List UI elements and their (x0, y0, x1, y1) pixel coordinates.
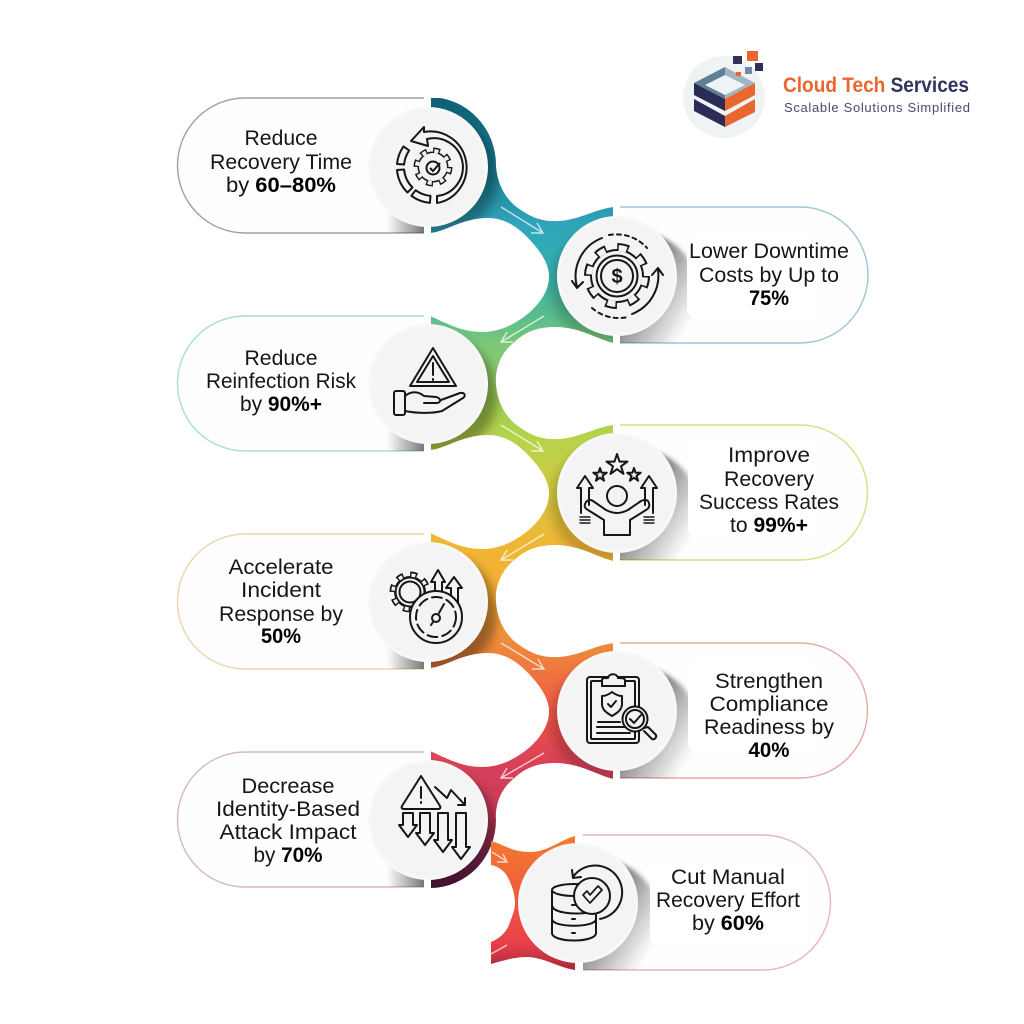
panel: step 8 cut manual recovery effort: by 60% (692, 912, 764, 935)
panel: step 5 accelerate incident response: 50% (261, 625, 301, 648)
icon: gear speedometer with arrows (368, 542, 488, 662)
panel: step 6 strengthen compliance: 40% (748, 739, 790, 762)
panel: step 6 strengthen compliance: Strengthen (715, 670, 823, 693)
panel: step 4 improve recovery success: to 99%+ (730, 514, 808, 537)
panel: step 2 lower downtime costs (620, 206, 869, 344)
panel: step 7 decrease identity attack impact: Identity-Based (216, 798, 360, 821)
panel: step 7 decrease identity attack impact: Decrease (242, 775, 334, 798)
panel: step 3 reduce reinfection risk: Reduce (244, 347, 318, 370)
panel: step 8 cut manual recovery effort: Cut Manual (671, 866, 785, 889)
panel: step 1 reduce recovery time: by 60–80% (226, 174, 336, 197)
panel: step 1 reduce recovery time: Recovery Time (210, 151, 352, 174)
logo: Cloud Tech Services: Scalable Solutions Simplified (784, 100, 970, 115)
panel: step 1 reduce recovery time (176, 97, 424, 234)
panel: step 4 improve recovery success (620, 424, 868, 561)
logo: Cloud Tech Services (683, 51, 970, 138)
logo: Cloud Tech Services: Cloud Tech Services (783, 74, 969, 97)
panel: step 2 lower downtime costs: Lower Downtime (689, 240, 849, 263)
panel: step 7 decrease identity attack impact: by 70% (254, 844, 323, 867)
panel: step 8 cut manual recovery effort: Recovery Effort (656, 889, 800, 912)
icon: hand holding warning triangle (368, 324, 488, 444)
panel: step 3 reduce reinfection risk: by 90%+ (240, 393, 322, 416)
icon: warning with falling arrows (368, 760, 488, 880)
panel: step 5 accelerate incident response (176, 533, 424, 670)
panel: step 8 cut manual recovery effort (583, 834, 832, 971)
panel: step 7 decrease identity attack impact: Attack Impact (220, 821, 357, 844)
panel: step 5 accelerate incident response: Accelerate (228, 556, 334, 579)
flow arrows (491, 207, 544, 954)
panel: step 4 improve recovery success: Improve (728, 444, 810, 467)
panel: step 6 strengthen compliance: Compliance (710, 693, 828, 716)
panel: step 6 strengthen compliance: Readiness by (704, 716, 835, 739)
icon: person with stars and rising arrows (557, 433, 677, 553)
icon: dollar gear cycle: $ (611, 266, 623, 288)
panel: step 5 accelerate incident response: Incident (241, 579, 321, 602)
panel: step 1 reduce recovery time: Reduce (244, 127, 318, 150)
icon: recovery gear cycle (368, 107, 488, 227)
panel: step 6 strengthen compliance (620, 642, 868, 779)
panel: step 3 reduce reinfection risk: Reinfection Risk (206, 370, 356, 393)
panel: step 2 lower downtime costs: 75% (749, 287, 789, 310)
icon: dollar gear cycle (557, 216, 677, 336)
panel: step 7 decrease identity attack impact (176, 751, 424, 888)
panel: step 4 improve recovery success: Recovery (724, 468, 815, 491)
icon: database with check (518, 843, 638, 963)
panel: step 3 reduce reinfection risk (176, 315, 424, 452)
final ribbon segment (491, 836, 575, 970)
icon: clipboard with shield and magnifier (557, 651, 677, 771)
panel: step 5 accelerate incident response: Response by (219, 603, 344, 626)
flow ribbon connecting all steps (431, 98, 613, 888)
panel: step 2 lower downtime costs: Costs by Up to (699, 264, 839, 287)
panel: step 4 improve recovery success: Success Rates (699, 491, 839, 514)
